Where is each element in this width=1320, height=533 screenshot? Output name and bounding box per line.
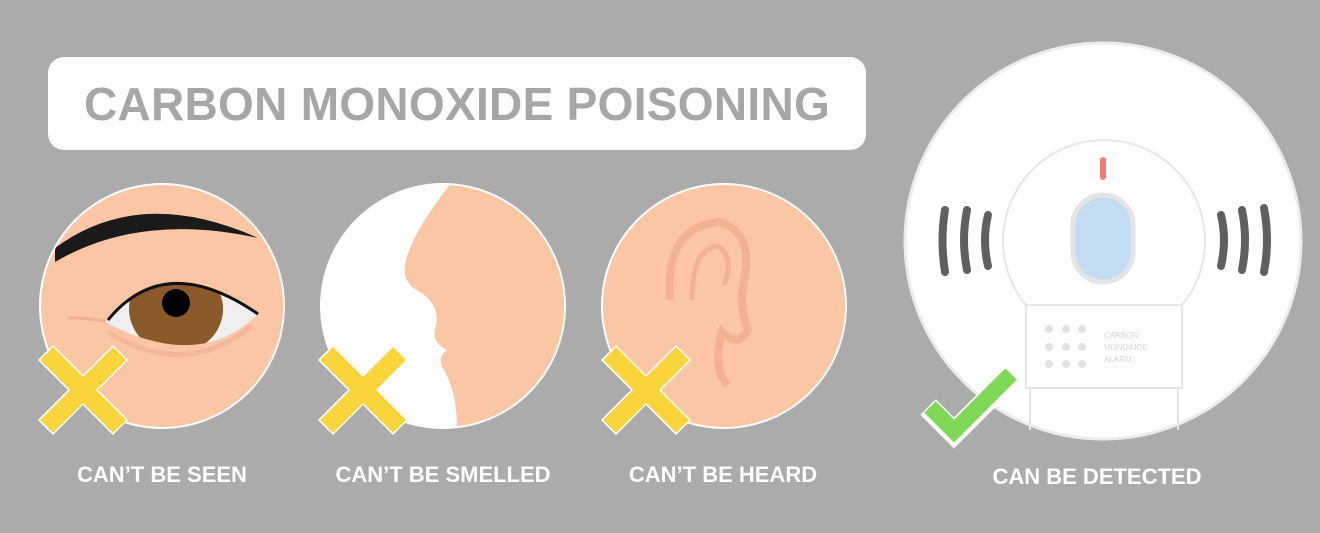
icon: sound waves bbox=[942, 208, 1267, 272]
panel: alarm: ALARM bbox=[1104, 355, 1132, 364]
icon: check mark bbox=[928, 374, 1013, 433]
panel: ear bbox=[601, 183, 847, 429]
title: CARBON MONOXIDE POISONING bbox=[84, 78, 830, 130]
panel: nose bbox=[320, 183, 566, 429]
title bbox=[48, 57, 866, 150]
panel: alarm: MONOXIDE bbox=[1104, 343, 1148, 352]
panel: eye bbox=[39, 183, 285, 429]
label: smelled: CAN’T BE SMELLED bbox=[335, 462, 551, 487]
label: seen: CAN’T BE SEEN bbox=[77, 462, 247, 487]
icon: x marks bbox=[39, 346, 690, 434]
icon: eyebrow bbox=[55, 214, 258, 262]
icon: eye bbox=[105, 282, 259, 346]
label: heard: CAN’T BE HEARD bbox=[629, 462, 817, 487]
illustrations bbox=[38, 42, 1302, 448]
panel: alarm: CARBON bbox=[1104, 331, 1138, 340]
panel: alarm bbox=[905, 43, 1301, 439]
label: detected: CAN BE DETECTED bbox=[992, 464, 1202, 489]
